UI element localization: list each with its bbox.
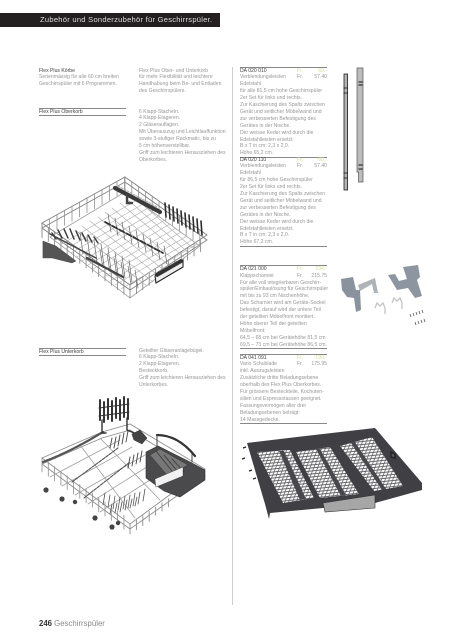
illustration: upper basket [42, 177, 207, 298]
illustration: cutlery drawer [242, 428, 422, 519]
product: DA 020 010: 60.- [318, 68, 327, 74]
text: Oberkorb features [139, 108, 226, 163]
footer page number: 246 Geschirrspüler [39, 619, 105, 628]
product: DA 020 010: Fr. [297, 74, 303, 80]
product: DA 020 110: Verblendungsleisten [240, 163, 286, 169]
product: DA 041 091: 175.95 [311, 361, 327, 367]
text: basket overview: Flex Plus Ober- und Unterkorb [139, 68, 208, 74]
product: DA 020 110: 60.- [318, 156, 327, 162]
text: Flex Plus Körbe intro: Flex Plus Körbe [39, 68, 75, 74]
product: DA 021 000: befestigt, darauf wird der untere Teil [240, 307, 321, 313]
product: DA 020 110: Edelstahl [240, 170, 261, 176]
product: DA 021 000: Fr. [297, 266, 303, 272]
product: DA 041 091 [240, 355, 327, 423]
text: Unterkorb features: 6 Klapp-Stacheln. [139, 354, 179, 360]
product: DA 041 091: Fr. [297, 355, 303, 361]
product: DA 021 000: 215.75 [311, 273, 327, 279]
product: DA 041 091: Für grössere Besteckteile, Kochuten- [240, 389, 324, 395]
product: DA 020 110: Fr. [297, 156, 303, 162]
text: Oberkorb features: 6 Klapp-Stacheln. [139, 108, 179, 114]
product: DA 021 000: Das Scharnier wird am Geräte-Sockel [240, 300, 326, 306]
text: Oberkorb features: Griff zum leichteren Herausziehen des [139, 150, 226, 156]
text: basket overview: für mehr Flexibilität und leichtere [139, 74, 213, 80]
product: DA 020 110: Gerätes in der Nische. [240, 212, 291, 218]
product: DA 021 000: 69,5 – 73 cm bei Gerätehöhe 86,5 cm. [240, 342, 327, 348]
product: DA 021 000 [240, 266, 328, 348]
product: DA 020 010: DA 020 010 [240, 68, 267, 74]
product: DA 021 000: Für alle voll integrierbaren Geschirr- [240, 280, 321, 286]
text: Oberkorb features: 2 Gläserauflagen. [139, 122, 179, 128]
text: Unterkorb features: Geteilter Gläseranlagebügel. [139, 348, 204, 354]
text: Unterkorb features: Besteckkorb. [139, 368, 168, 374]
product: DA 020 110 [240, 156, 327, 245]
product: DA 020 110: Gerät und seitlicher Möbelwand und [240, 198, 322, 204]
product: DA 041 091: Zusätzliche dritte Beladungsebene [240, 375, 318, 381]
product: DA 041 091: Beladungsebenen beträgt: [240, 410, 300, 416]
heading: Flex Plus Oberkorb [39, 108, 126, 116]
product: DA 020 010: Zur Kaschierung des Spalts zwischen [240, 102, 325, 108]
product: DA 020 010: Edelstahlleisten ersetzt. [240, 137, 294, 143]
product: DA 020 010: B x T in cm: 2,3 x 2,0. [240, 143, 289, 149]
text: Oberkorb features: Mit Überauszug und Leichtlauffunktion [139, 129, 226, 135]
product: DA 020 110: B x T in cm: 2,3 x 2,0. [240, 232, 289, 238]
text: Unterkorb features: 2 Klapp-Etageren. [139, 361, 180, 367]
heading: Flex Plus Oberkorb: Flex Plus Oberkorb [39, 109, 83, 115]
product: DA 020 110: für 86,5 cm hohe Geschirrspüler [240, 177, 313, 183]
product: DA 020 110: zur verbesserten Befestigung des [240, 205, 316, 211]
product: DA 021 000: 234.- [315, 266, 327, 272]
product: DA 021 000: 64,5 – 68 cm bei Gerätehöhe 81,5 cm [240, 335, 326, 341]
product: DA 020 110: Der weisse Keder wird durch die [240, 219, 313, 225]
text: Oberkorb features: 5 cm höhenverstellbar. [139, 143, 190, 149]
rule below DA 021 000 [240, 348, 327, 349]
product: DA 020 110: DA 020 110 [240, 156, 266, 162]
rule above DA 020 010 [240, 67, 327, 68]
product: DA 041 091: inkl. Auszugsleisten [240, 368, 284, 374]
text: Oberkorb features: Oberkorbes. [139, 157, 167, 163]
text: basket overview: des Geschirrspülers. [139, 88, 186, 94]
product: DA 020 010: Der weisse Keder wird durch die [240, 130, 313, 136]
product: DA 020 110: Höhe 67,2 cm. [240, 239, 273, 245]
product: DA 021 000: mit bis zu 93 cm Nischenhöhe. [240, 293, 309, 299]
product: DA 020 010: 57.40 [314, 74, 327, 80]
text: Flex Plus Körbe intro: Serienmässig für alle 60 cm breiten [39, 74, 119, 80]
rule above DA 021 000 [240, 265, 327, 266]
product: DA 020 010: zur verbesserten Befestigung des [240, 116, 316, 122]
illustration: trim strip short [344, 74, 348, 190]
product: DA 020 110: Zur Kaschierung des Spalts zwischen [240, 191, 325, 197]
title bar [0, 13, 220, 27]
product: DA 020 010: Gerät und seitlicher Möbelwand und [240, 109, 322, 115]
rule above DA 041 091 [240, 354, 327, 355]
heading: Flex Plus Unterkorb [39, 348, 126, 356]
product: DA 041 091: oberhalb des Flex Plus Oberkorbes. [240, 382, 321, 388]
product: DA 020 010: für alle 81,5 cm hohe Geschirrspüler [240, 88, 322, 94]
rule above DA 020 110 [240, 156, 327, 158]
heading: Flex Plus Unterkorb: Flex Plus Unterkorb [39, 349, 84, 355]
text: Oberkorb features: 4 Klapp-Etageren. [139, 115, 180, 121]
column divider [232, 67, 233, 605]
rule below DA 020 110 [240, 246, 327, 247]
product: DA 021 000: Möbelfront: [240, 328, 265, 334]
product: DA 020 010: Höhe 65,2 cm. [240, 150, 273, 156]
product: DA 021 000: der geteilten Möbelfront montiert. [240, 314, 315, 320]
product: DA 020 110: Edelstahlleisten ersetzt. [240, 226, 294, 232]
text: Flex Plus Körbe intro: Geschirrspüler mit 6 Programmen. [39, 81, 117, 87]
product: DA 020 110: 2er Set für links und rechts. [240, 184, 302, 190]
product: DA 021 000: spüler/Einbaulösung für Geschirrspüler [240, 286, 328, 292]
product: DA 021 000: DA 021 000 [240, 266, 267, 272]
text: Unterkorb features [139, 348, 226, 388]
text: basket overview [139, 68, 222, 94]
product: DA 020 010: Fr. [297, 68, 303, 74]
product: DA 041 091: Fassungsvermögen aller drei [240, 403, 306, 409]
product: DA 020 010 [240, 68, 327, 156]
rule below DA 041 091 [240, 423, 327, 424]
product: DA 021 000: Höhe oberer Teil der geteilten [240, 321, 307, 327]
product: DA 020 110: 57.40 [314, 163, 327, 169]
product: DA 041 091: 14 Massgedecke. [240, 417, 280, 423]
illustration: hinge set [341, 265, 425, 325]
product: DA 041 091: silien und Espressotassen geeignet. [240, 396, 322, 402]
text: Unterkorb features: Unterkorbes. [139, 382, 168, 388]
product: DA 041 091: Vario Schublade [240, 361, 277, 367]
text: Flex Plus Körbe intro [39, 68, 119, 87]
text: Unterkorb features: Griff zum leichteren Herausziehen des [139, 375, 226, 381]
text: basket overview: Handhabung beim Be- und Entladen [139, 81, 221, 87]
product: DA 041 091: Fr. [297, 361, 303, 367]
illustration: lower basket [42, 397, 205, 534]
product: DA 041 091: 190.- [315, 355, 327, 361]
product: DA 020 110: Fr. [297, 163, 303, 169]
product: DA 020 010: Verblendungsleisten [240, 74, 286, 80]
product: DA 020 010: Gerätes in der Nische. [240, 123, 291, 129]
product: DA 020 010: 2er Set für links und rechts. [240, 95, 302, 101]
text: Oberkorb features: sowie 3-stufiger Rackmatic, bis zu [139, 136, 216, 142]
product: DA 041 091: DA 041 091 [240, 355, 267, 361]
product: DA 021 000: Klappscharnier [240, 273, 274, 279]
product: DA 020 010: Edelstahl [240, 81, 261, 87]
title bar: Zubehör und Sonderzubehör für Geschirrspüler. [40, 15, 212, 24]
product: DA 021 000: Fr. [297, 273, 303, 279]
illustration: trim strip long [357, 68, 363, 182]
